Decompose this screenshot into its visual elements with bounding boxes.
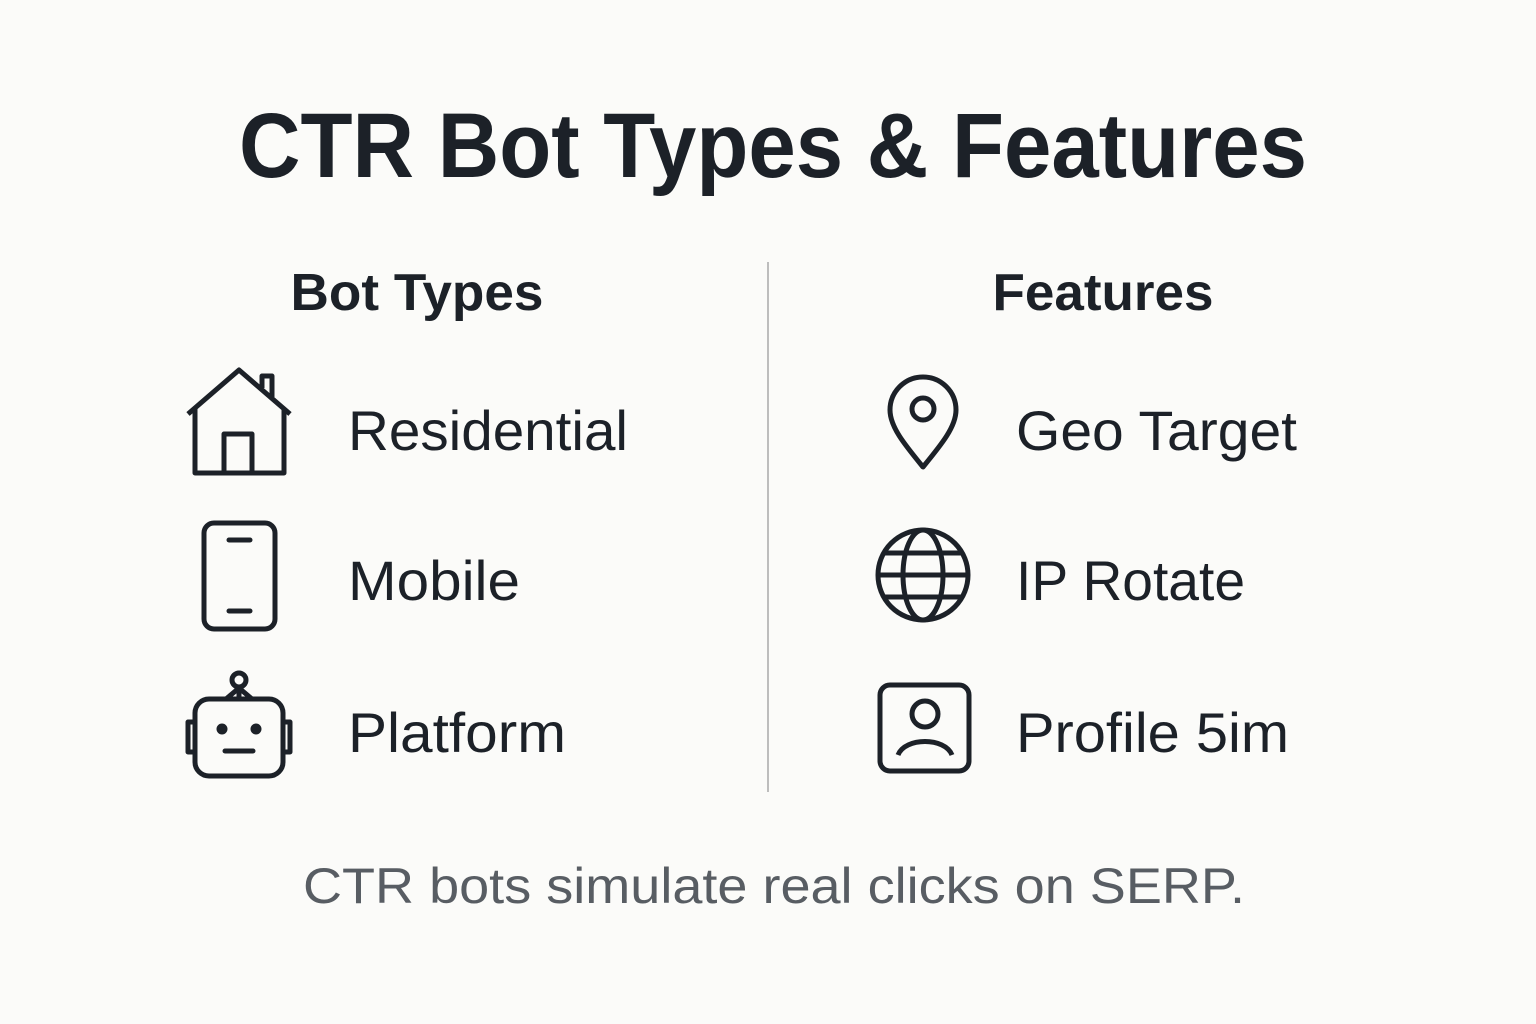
label: Profile 5im: Profile 5im [1016,701,1289,764]
heading: Bot Types: Bot Types [290,264,544,322]
icon: mobile phone [204,523,275,629]
icon: house [188,370,290,473]
icon: location pin [890,377,956,467]
footer caption: CTR bots simulate real clicks on SERP. [303,858,1245,914]
label: IP Rotate: IP Rotate [1016,549,1245,612]
icon: profile [880,685,969,771]
heading: Features: Features [992,264,1214,322]
title: CTR Bot Types & Features [239,95,1307,197]
label: Geo Target: Geo Target [1016,399,1297,462]
icon: globe [878,530,968,620]
icon: robot [188,673,290,776]
label: Mobile: Mobile [348,549,520,612]
label: Platform: Platform [348,701,566,764]
label: Residential: Residential [348,399,628,462]
